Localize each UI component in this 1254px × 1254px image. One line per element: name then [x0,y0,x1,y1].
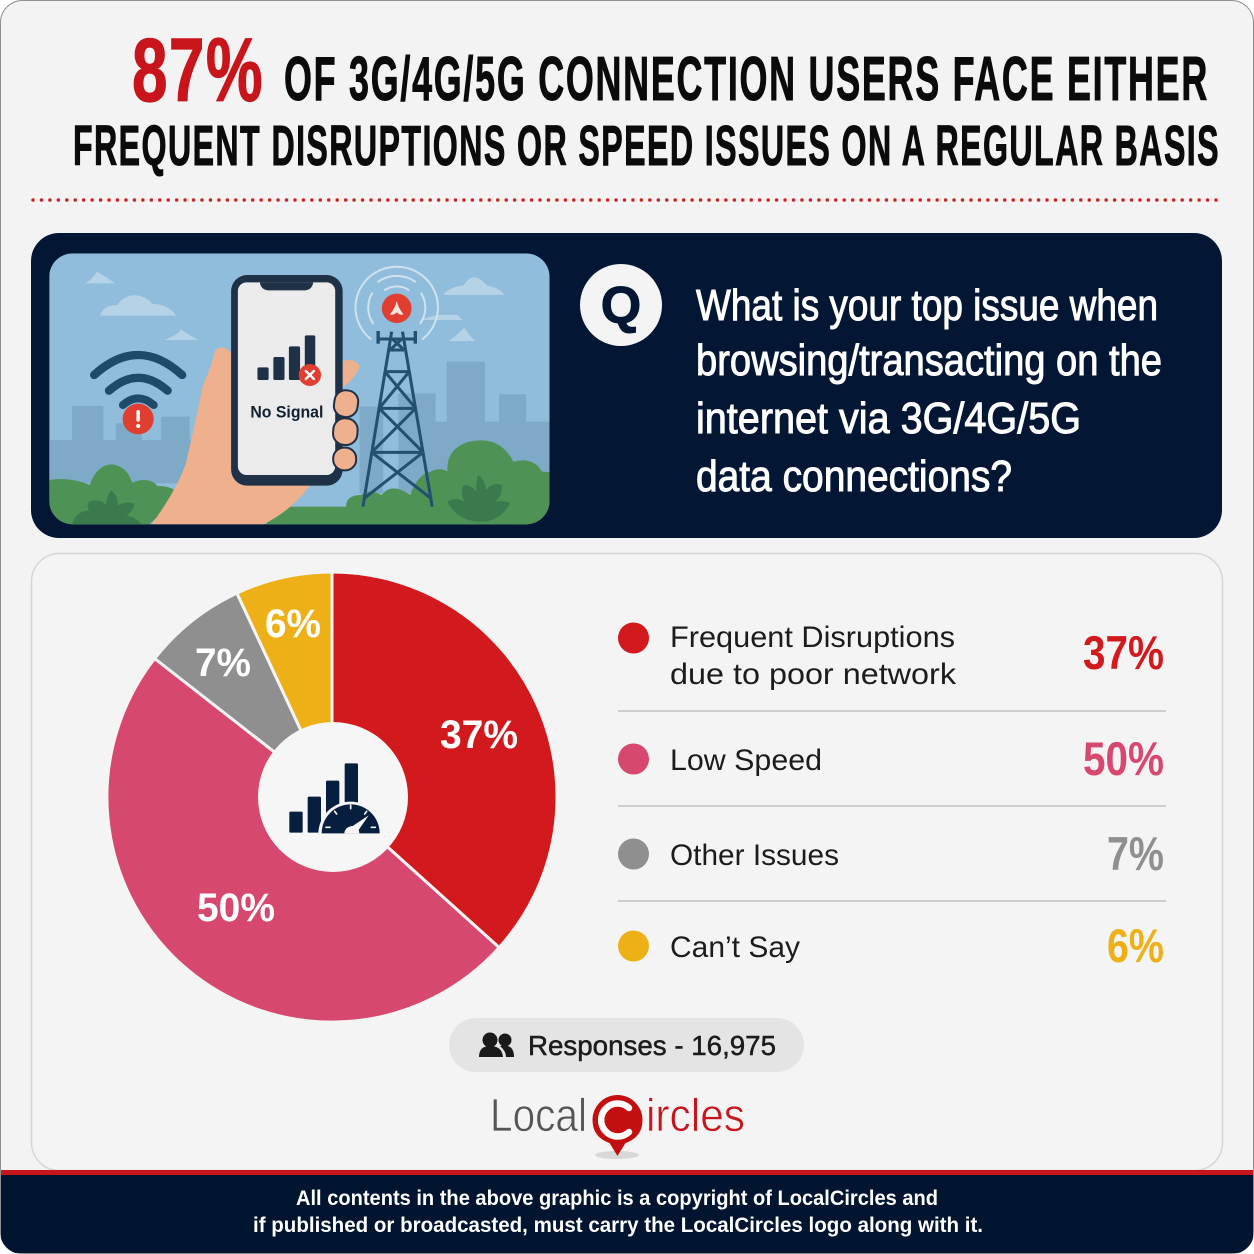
legend item: can't say: Can’t Say [670,931,800,964]
panel: question [31,233,1222,538]
question text: internet via 3G/4G/5G [696,394,1081,443]
slice labels: 6% [265,602,321,646]
legend item: low speed: Low Speed [670,744,822,777]
phone label: No Signal [250,403,323,421]
question text: browsing/transacting on the [696,336,1162,385]
responses pill: Responses - 16,975 [528,1030,776,1061]
legend item: can't say: 6% [1107,919,1164,972]
ground and bushes [49,440,562,530]
legend item: low speed: 50% [1083,732,1164,785]
legend item: other issues [618,827,1164,880]
slice labels: 37% [440,713,518,757]
legend item: frequent disruptions: due to poor network [670,658,957,691]
LocalCircles logo [490,1089,745,1159]
icon: wifi warning [94,355,182,405]
icon: Q badge [580,264,662,346]
footer [1,1170,1253,1253]
legend item: frequent disruptions [618,621,1164,691]
legend item: frequent disruptions: Frequent Disruptions [670,621,955,654]
legend item: frequent disruptions: 37% [1083,626,1164,679]
footer: if published or broadcasted, must carry the LocalCircles logo along with it. [253,1214,983,1237]
icon: speed gauge [289,763,383,834]
legend item: can't say [618,919,1164,972]
panel: results [32,554,1222,1170]
icon: fingers [332,389,360,470]
illustration: no signal scene [49,253,562,530]
icon: Q badge: Q [601,277,641,335]
question text [696,281,1162,501]
slice labels: 50% [197,886,275,930]
title: 87% [132,21,264,121]
LocalCircles logo: ircles [646,1089,745,1141]
legend item: other issues: 7% [1107,827,1164,880]
question text: What is your top issue when [696,281,1158,330]
legend item: low speed [618,732,1164,785]
clouds [85,272,505,341]
slice labels: 7% [195,641,251,685]
icon: people [479,1032,514,1057]
donut chart [107,572,557,1022]
responses pill [449,1018,804,1072]
legend item: other issues: Other Issues [670,839,839,872]
city skyline [49,362,550,495]
legend [618,621,1166,972]
icon: hand [152,347,311,524]
slice labels [195,602,518,930]
LocalCircles logo: Local [490,1089,587,1141]
footer: All contents in the above graphic is a copyright of LocalCircles and [296,1187,938,1210]
icon: cell tower [363,331,432,507]
question text: data connections? [696,452,1012,501]
title [73,21,1220,178]
icon: phone [231,275,343,486]
icon: signal bars [257,335,315,380]
